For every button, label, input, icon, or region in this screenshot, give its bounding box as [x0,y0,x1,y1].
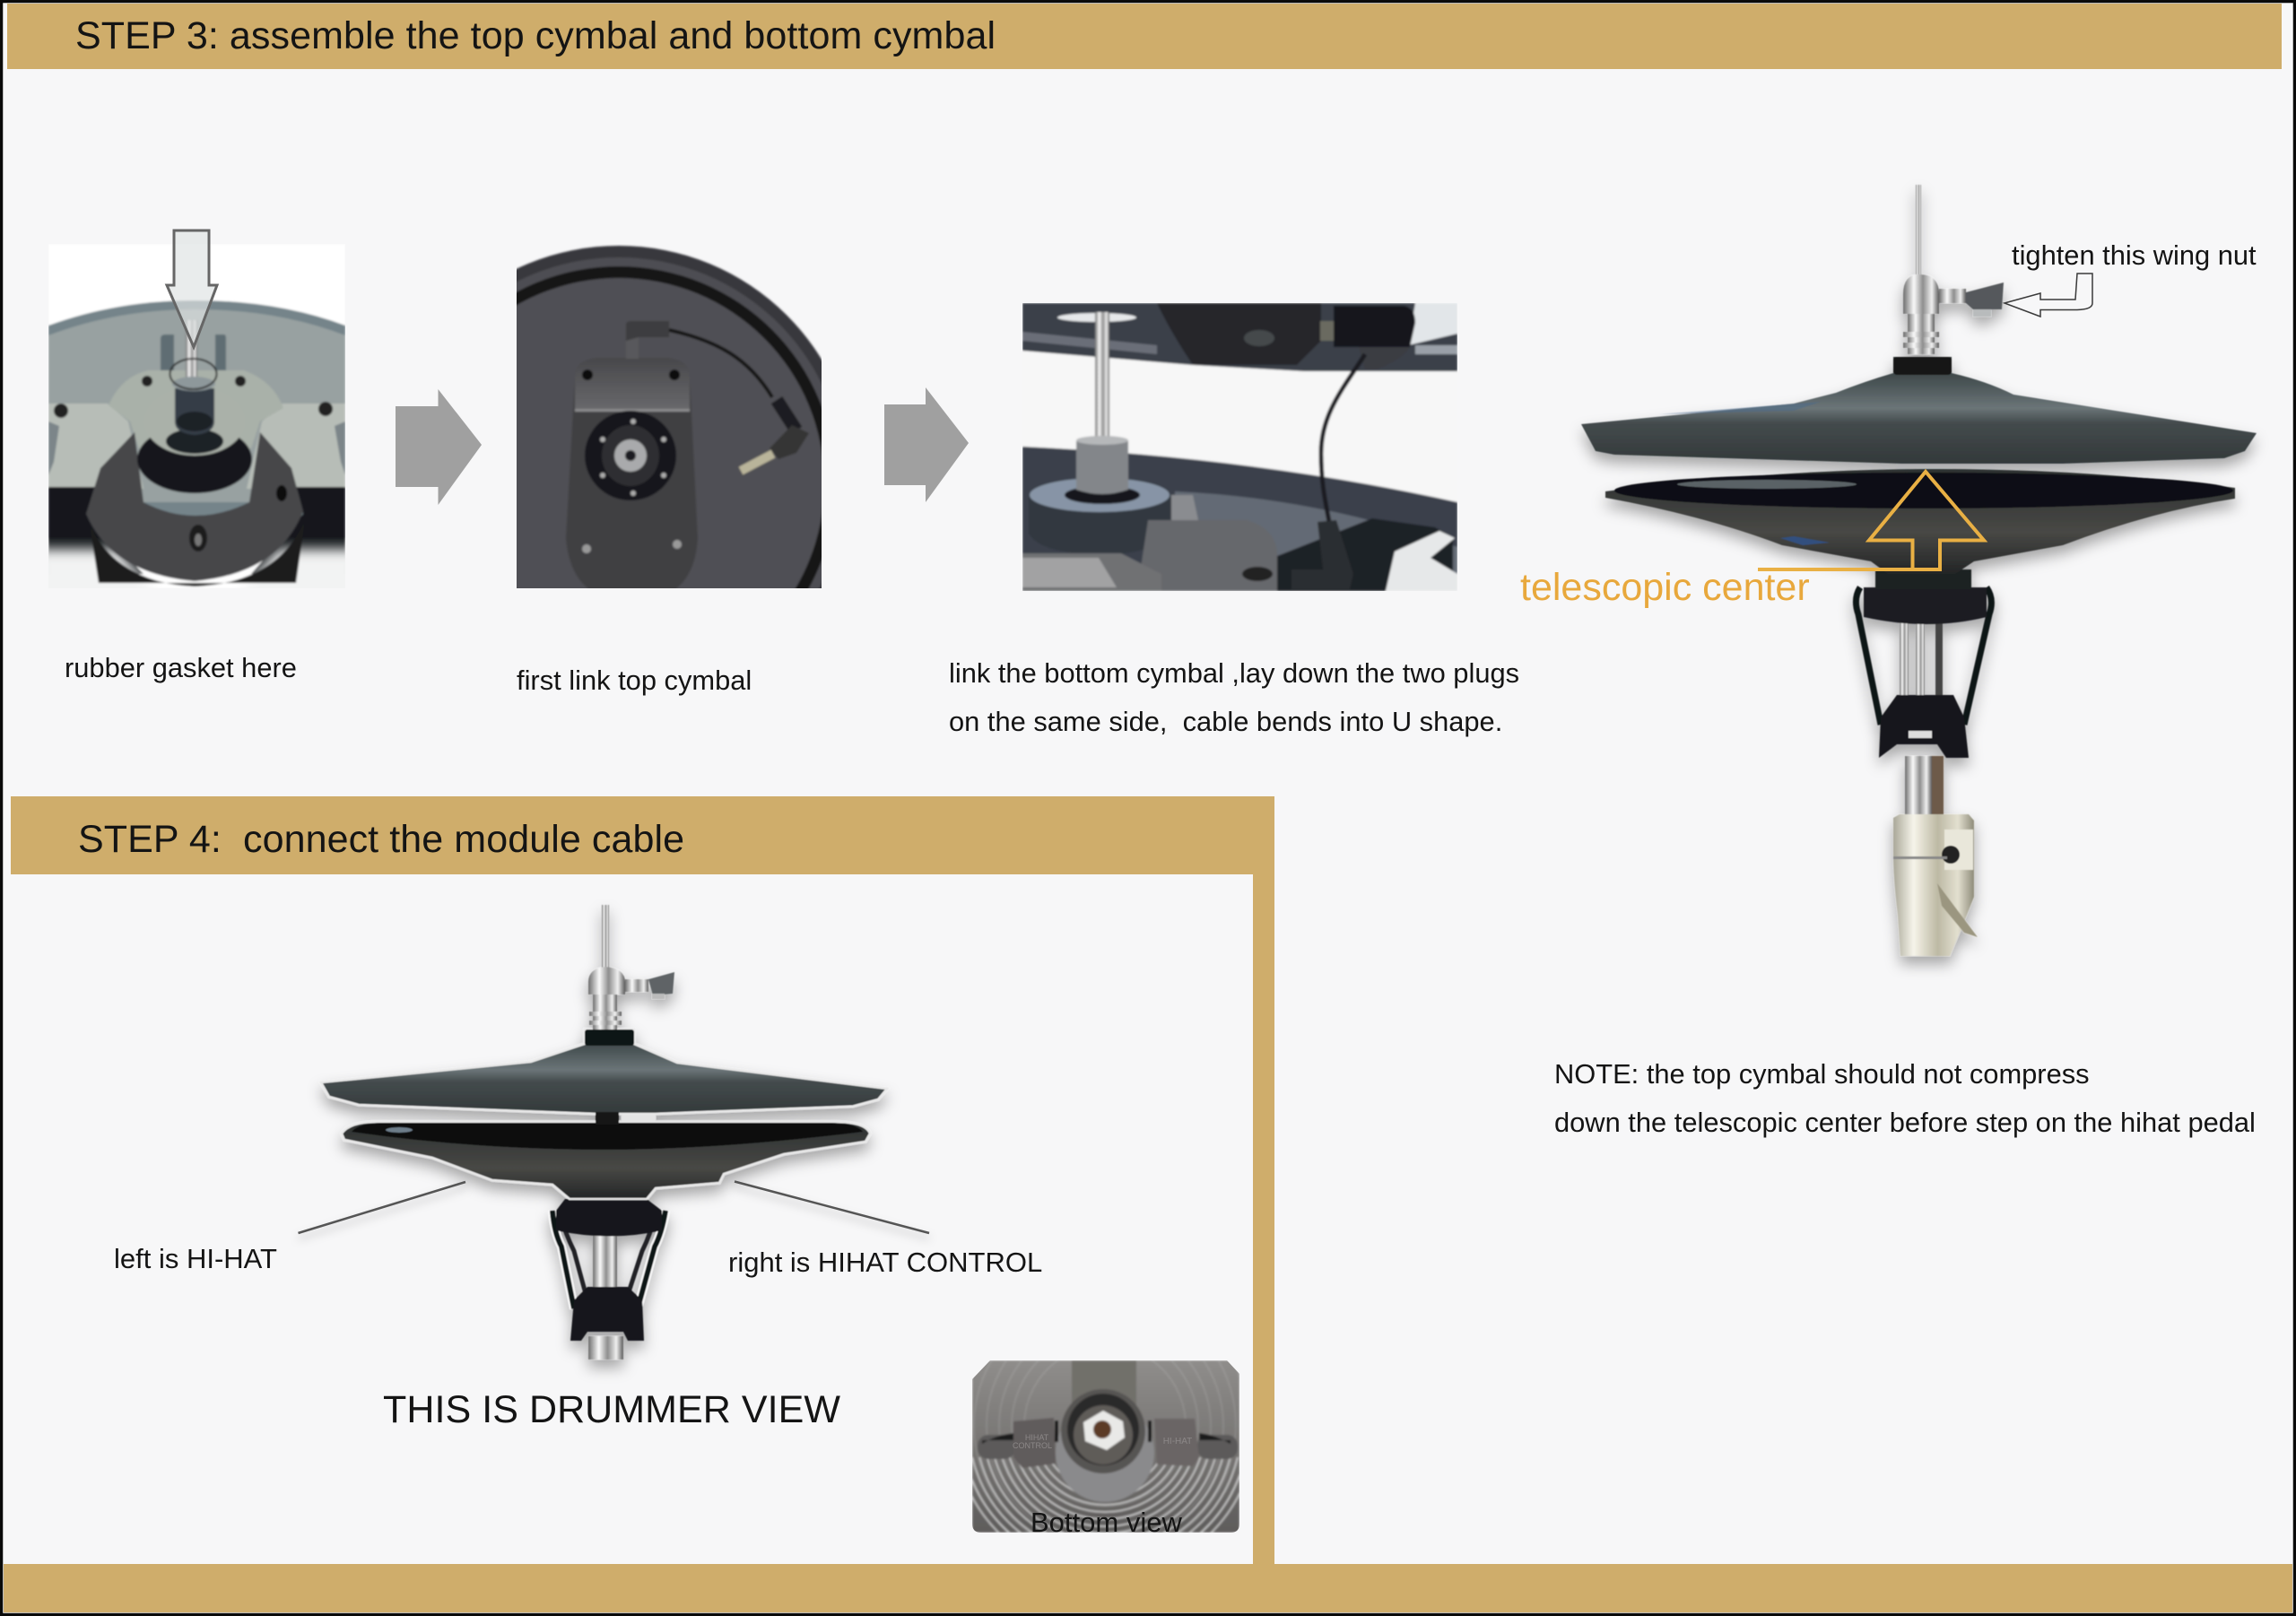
heading: step 3: STEP 3: assemble the top cymbal and bottom cymbal [75,14,996,57]
spider rods and arms [1900,619,1909,708]
photo: rubber gasket on center rod [48,230,345,588]
arrow: down onto gasket [167,230,217,347]
lower mounting rods and clamp [1905,756,1932,817]
label: telescopic center: telescopic center [1520,566,1810,609]
arrow: step 2 to 3 [884,387,969,502]
caption: link the bottom cymbal [949,657,1519,737]
label: right jack: right is HIHAT CONTROL [728,1247,1042,1278]
photo: bottom cymbal and rod with cable [1022,303,1457,591]
photo: bottom view [972,1360,1239,1533]
callout arrow: wing nut [2005,274,2092,317]
leader line: left [298,1182,465,1233]
tab label: hihat control: HIHAT [1025,1433,1049,1442]
footer bar [4,1564,2292,1612]
photo: top cymbal underside with cable [517,244,822,588]
tab label: control: CONTROL [1013,1441,1052,1450]
lower spider [588,1336,623,1360]
panel: step 4 frame [11,796,1274,1568]
caption: link the bottom cymbal: on the same side, cable bends into U shape. [949,706,1502,737]
label: wing nut: tighten this wing nut [2012,239,2257,271]
top cymbal [321,1030,887,1114]
leader line: right [735,1182,929,1233]
note text: down the telescopic center before step on the hihat pedal [1554,1107,2256,1138]
center clamp and rod [602,905,609,968]
header bar: step 3 [7,4,2282,69]
heading: step 4: STEP 4: connect the module cable [78,818,684,861]
hi-hat assembly: step 3 [1581,185,2257,956]
label: left jack: left is HI-HAT [114,1243,277,1274]
caption: first link: first link top cymbal [517,665,752,696]
center clamp and rod [1916,185,1921,274]
arrow: step 1 to 2 [396,389,482,505]
note text: NOTE: the top cymbal should not compress [1554,1058,2090,1090]
caption: bottom view: Bottom view [1031,1507,1182,1538]
caption: drummer view: THIS IS DRUMMER VIEW [383,1388,840,1431]
note text [1554,1058,2256,1138]
caption: rubber gasket: rubber gasket here [65,652,297,683]
caption: link the bottom cymbal: link the bottom cymbal ,lay down the two plugs [949,657,1519,689]
lower cymbal [342,1122,870,1199]
lower cymbal [1605,469,2235,574]
top cymbal [1581,357,2257,464]
hi-hat assembly: drummer view [321,905,887,1360]
callout arrow: telescopic center [1758,472,1984,569]
tab label: hi-hat: HI-HAT [1163,1437,1192,1447]
